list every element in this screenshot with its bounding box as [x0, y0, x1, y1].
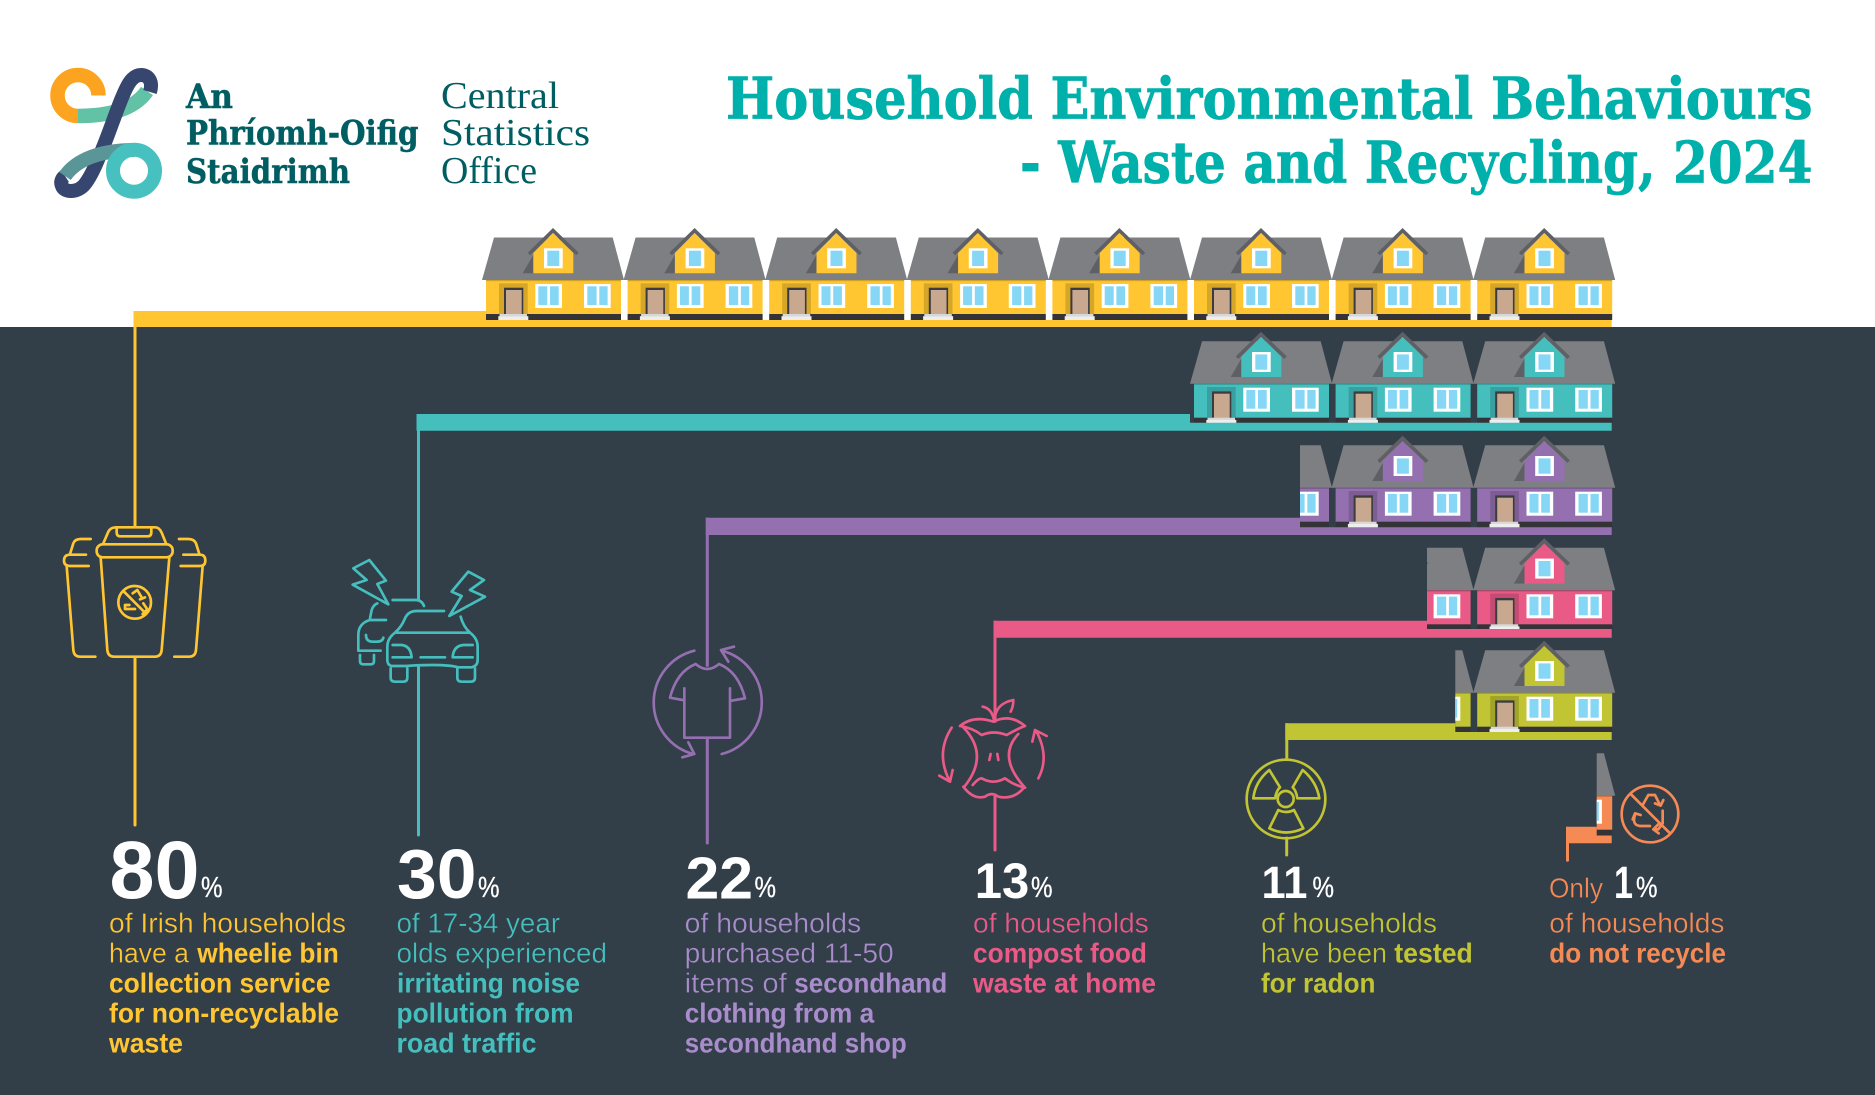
logo text: English name [441, 75, 590, 192]
houses row: teal, 30% [416, 334, 1615, 600]
number: Only [1549, 872, 1603, 903]
number: 80 [110, 825, 200, 916]
description [108, 908, 346, 1059]
stat: 30% noise pollution: % [478, 872, 500, 904]
description: tested [1394, 938, 1473, 969]
logo text: English name: Central [441, 75, 559, 117]
stat: 80% wheelie bin: % [201, 872, 222, 904]
logo text: English name: Statistics [441, 112, 590, 154]
description: irritating noise [397, 968, 580, 999]
number: % [1636, 872, 1658, 904]
description: of households [1549, 908, 1724, 939]
description [1549, 908, 1726, 969]
description: purchased 11-50 [685, 938, 894, 969]
icon: apple core with circular arrows [939, 700, 1047, 797]
logo text: Irish name [185, 77, 418, 192]
houses row: pink, 13% [994, 541, 1615, 723]
description: compost food [973, 938, 1147, 969]
description: do not recycle [1549, 938, 1726, 969]
description: secondhand [794, 968, 947, 999]
stat: 80% wheelie bin [108, 825, 346, 1059]
logo text: Irish name: Phríomh-Oifig [186, 114, 418, 154]
icon: cars with noise bolts [353, 560, 485, 682]
icon: T-shirt with circular arrows [654, 647, 762, 757]
description: for non-recyclable [109, 998, 339, 1029]
title [726, 64, 1812, 197]
description [1261, 908, 1473, 999]
stat: 13% compost: % [1031, 872, 1052, 904]
description: items of [685, 968, 787, 999]
stat: 13% compost [972, 853, 1156, 999]
description: of households [1261, 908, 1437, 939]
stat: only 1% do not recycle [1549, 857, 1726, 969]
stat: 22% secondhand clothing [685, 845, 947, 1059]
stat: 22% secondhand clothing: % [754, 872, 776, 904]
icon: no recycling [1622, 786, 1678, 842]
number: 1 [1614, 857, 1633, 908]
houses row: orange sliver, 1% [1566, 753, 1616, 862]
description: have been [1261, 938, 1387, 969]
number: 11 [1262, 857, 1308, 908]
description: road traffic [396, 1028, 536, 1059]
description: secondhand shop [685, 1028, 907, 1059]
logo: An Phríomh-Oifig Staidrimh / Central Statistics Office [57, 75, 590, 192]
houses row: yellow, 80% [134, 230, 1615, 528]
description: wheelie bin [196, 938, 339, 969]
number [1549, 857, 1658, 908]
description: pollution from [396, 998, 574, 1029]
number: 30 [397, 835, 476, 913]
connector lines below icons [135, 657, 1287, 855]
description: waste [108, 1028, 183, 1059]
stat: 30% noise pollution [396, 835, 607, 1059]
icon: wheelie bins with no-recycling symbol [64, 527, 205, 657]
number: 22 [686, 845, 753, 911]
icon: CSO infinity knot [57, 75, 155, 192]
houses row: olive, 11% [1285, 643, 1615, 759]
description: of Irish households [109, 908, 346, 939]
description: of 17-34 year [396, 908, 560, 939]
description: of households [973, 908, 1149, 939]
description: clothing from a [685, 998, 875, 1029]
logo text: Irish name: Staidrimh [186, 152, 350, 192]
description: have a [109, 938, 190, 969]
description: of households [685, 908, 861, 939]
stat: 11% radon: % [1312, 872, 1334, 904]
description: for radon [1261, 968, 1376, 999]
description [396, 908, 607, 1059]
background: dark lower panel [0, 327, 1875, 1095]
houses row: purple, 22% [706, 438, 1615, 667]
description [972, 908, 1156, 999]
logo text: English name: Office [441, 150, 537, 192]
icon: radiation symbol [1247, 760, 1325, 838]
description: olds experienced [396, 938, 607, 969]
description: collection service [109, 968, 330, 999]
description [685, 908, 947, 1059]
stat: 11% radon [1261, 857, 1473, 999]
logo text: Irish name: An [185, 77, 233, 117]
number: 13 [975, 853, 1029, 909]
description: waste at home [972, 968, 1156, 999]
